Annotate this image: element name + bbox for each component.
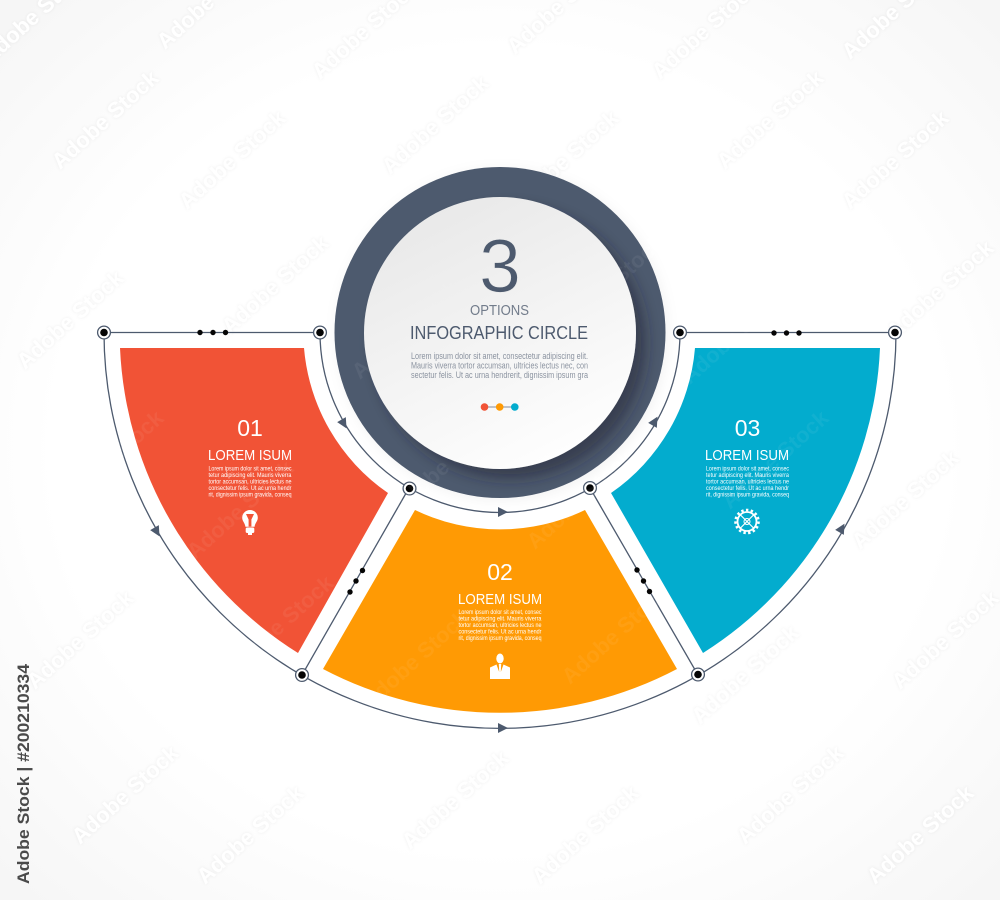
panel: 03 blue — [611, 348, 880, 653]
background watermarks: Adobe Stock — [217, 230, 334, 339]
background watermarks: Adobe Stock — [67, 740, 184, 849]
body 01: tetur adipiscing elit. Mauris viverra — [208, 472, 292, 479]
panel: 02 orange — [323, 510, 677, 713]
icon: gear — [736, 510, 758, 533]
overlay watermarks: Adobe Stock — [357, 605, 474, 714]
central circle — [334, 167, 666, 498]
body 01: consectetur felis. Ut ac urna hendr — [208, 485, 292, 492]
dark ring — [334, 167, 666, 498]
background watermarks: Adobe Stock — [377, 70, 494, 179]
circle body text: Lorem ipsum dolor sit amet, consectetur adipiscing elit. — [411, 351, 588, 361]
body 01 — [208, 466, 292, 499]
overlay watermarks: Adobe Stock — [522, 445, 639, 554]
circle body text: Mauris viverra tortor accumsan, ultricies lectus nec, con — [411, 360, 588, 370]
panel: 01 red — [120, 348, 388, 653]
circle heading: INFOGRAPHIC CIRCLE — [410, 323, 588, 343]
overlay watermarks: Adobe Stock — [182, 455, 299, 564]
circle body text: sectetur felis. Ut ac urna hendrerit, dignissim ipsum gra — [411, 370, 588, 380]
body 02: tetur adipiscing elit. Mauris viverra — [458, 616, 542, 622]
circle body text — [411, 351, 588, 380]
body 02: Lorem ipsum dolor sit amet, consec — [458, 609, 542, 616]
background watermarks: Adobe Stock — [862, 780, 979, 889]
background watermarks: Adobe Stock — [847, 445, 964, 554]
background watermarks: Adobe Stock — [887, 585, 1000, 694]
background watermarks: Adobe Stock — [22, 585, 139, 694]
body 03: Lorem ipsum dolor sit amet, consec — [706, 466, 790, 472]
overlay watermarks: Adobe Stock — [52, 405, 169, 514]
overlay watermarks: Adobe Stock — [717, 405, 834, 514]
body 03: rit, dignissim ipsum gravida, conseq — [706, 492, 789, 499]
big number 3: 3 — [479, 224, 521, 308]
background watermarks: Adobe Stock — [712, 65, 829, 174]
body 01: tortor accumsan, ultricies lectus ne — [208, 479, 292, 486]
overlay watermarks: Adobe Stock — [387, 410, 504, 519]
overlay watermarks: Adobe Stock — [557, 580, 674, 689]
background watermarks: Adobe Stock — [174, 105, 291, 214]
overlay watermarks: Adobe Stock — [347, 275, 464, 384]
overlay watermarks: Adobe Stock — [677, 280, 794, 389]
connector lines — [104, 332, 896, 728]
options label: OPTIONS — [470, 303, 529, 319]
three coloured dots — [481, 403, 519, 411]
heading 01: LOREM ISUM — [208, 448, 292, 464]
background watermarks: Adobe Stock — [732, 740, 849, 849]
number 02: 02 — [487, 559, 513, 585]
heading 02: LOREM ISUM — [458, 592, 542, 608]
body 03: consectetur felis. Ut ac urna hendr — [706, 485, 790, 492]
overlay watermarks: Adobe Stock — [552, 230, 669, 339]
body 03: tetur adipiscing elit. Mauris viverra — [706, 472, 789, 479]
background watermarks: Adobe Stock — [47, 65, 164, 174]
heading 03: LOREM ISUM — [705, 448, 789, 464]
body 01: Lorem ipsum dolor sit amet, consec — [208, 466, 292, 472]
background watermarks: Adobe Stock — [397, 745, 514, 854]
icon: businessman — [490, 654, 510, 679]
overlay watermarks — [52, 230, 834, 714]
background watermarks: Adobe Stock — [837, 105, 954, 214]
body 02: rit, dignissim ipsum gravida, conseq — [458, 635, 542, 642]
blue sector — [611, 348, 880, 653]
side stock id caption: Adobe Stock | #200210334 — [15, 663, 33, 884]
body 01: rit, dignissim ipsum gravida, conseq — [208, 492, 292, 499]
arrows — [150, 414, 849, 733]
number 01: 01 — [237, 415, 263, 441]
background watermarks: Adobe Stock — [192, 780, 309, 889]
connector nodes — [98, 326, 901, 681]
overlay watermarks: Adobe Stock — [222, 570, 339, 679]
body 03 — [706, 466, 790, 499]
body 02: tortor accumsan, ultricies lectus ne — [458, 622, 542, 629]
background watermarks: Adobe Stock — [527, 780, 644, 889]
body 03: tortor accumsan, ultricies lectus ne — [706, 479, 789, 486]
body 02: consectetur felis. Ut ac urna hendr — [458, 628, 542, 636]
light disk — [364, 197, 636, 469]
icon: light bulb — [242, 510, 258, 535]
number 03: 03 — [735, 415, 760, 441]
background watermarks: Adobe Stock — [882, 235, 999, 344]
small connector dots — [197, 330, 802, 595]
orange sector — [323, 510, 677, 713]
background watermarks: Adobe Stock — [12, 265, 129, 374]
body 02 — [458, 609, 542, 642]
background watermarks: Adobe Stock — [687, 620, 804, 729]
red sector — [120, 348, 388, 653]
background watermarks: Adobe Stock — [507, 105, 624, 214]
